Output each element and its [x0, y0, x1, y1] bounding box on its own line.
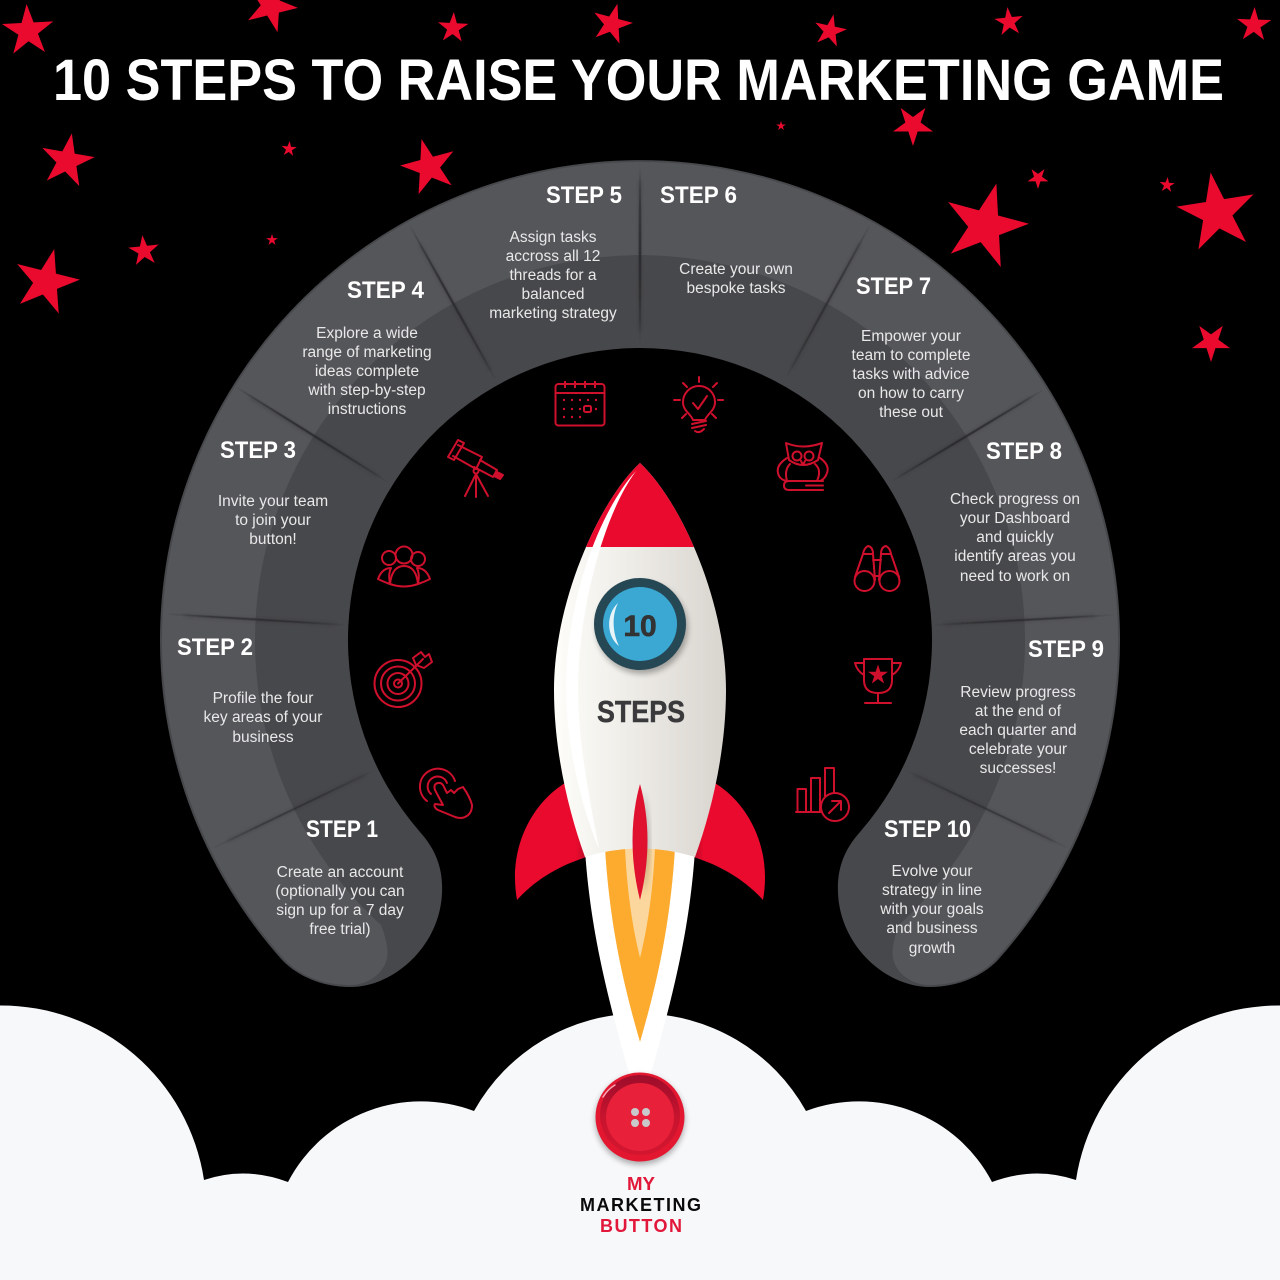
icon: binoculars	[854, 546, 900, 591]
step 9: Review progress	[960, 684, 1076, 701]
step 7: Empower your	[861, 328, 961, 345]
horseshoe panel of ten steps	[160, 160, 1120, 987]
step 8: Check progress on	[950, 491, 1080, 508]
lighter outer band	[162, 162, 1118, 985]
orange flame	[605, 848, 675, 1042]
step 2	[177, 634, 322, 746]
step 9: celebrate your	[969, 741, 1067, 758]
step 5: marketing strategy	[489, 305, 617, 322]
logo text: MARKETING	[580, 1195, 701, 1215]
rocket fins	[515, 783, 587, 900]
step 5: Assign tasks	[509, 229, 597, 246]
step 9: each quarter and	[959, 722, 1077, 739]
step 2: STEP 2	[177, 634, 253, 661]
rocket	[515, 460, 765, 1080]
pale inner flame	[625, 848, 655, 958]
stars	[1, 0, 1272, 362]
step 8: need to work on	[960, 568, 1070, 585]
step 9: STEP 9	[1028, 636, 1104, 663]
logo button	[595, 1072, 685, 1165]
step 7: team to complete	[852, 347, 970, 364]
step 10: growth	[909, 940, 955, 957]
step 4: STEP 4	[347, 277, 425, 304]
icon: team of people	[378, 546, 430, 586]
rocket body	[554, 463, 726, 857]
logo text: BUTTON	[600, 1216, 682, 1236]
step 10: and business	[886, 920, 978, 937]
icon: trophy with star	[855, 659, 901, 703]
step 8: and quickly	[976, 529, 1054, 546]
step 1	[275, 816, 405, 938]
step 2: Profile the four	[213, 690, 313, 707]
step 7: these out	[879, 404, 944, 421]
icon: target with arrow	[374, 652, 432, 707]
segment creases	[167, 166, 1113, 848]
step 5: STEP 5	[546, 182, 622, 209]
step 4: instructions	[328, 401, 406, 418]
step 1: sign up for a 7 day	[276, 902, 404, 919]
step 9: at the end of	[975, 703, 1062, 720]
step 4: with step-by-step	[307, 382, 426, 399]
icon: calendar	[556, 381, 604, 426]
clouds	[0, 1005, 1280, 1280]
logo text: MY	[627, 1174, 655, 1194]
step 6: Create your own	[679, 261, 793, 278]
icon: click hand	[420, 769, 472, 818]
step 3	[218, 437, 328, 548]
step 5: balanced	[522, 286, 584, 303]
step 7: tasks with advice	[852, 366, 970, 383]
step 1: STEP 1	[306, 816, 378, 843]
step 5	[489, 182, 622, 322]
step 4: range of marketing	[302, 344, 432, 361]
step 2: business	[232, 729, 294, 746]
step 3: button!	[249, 531, 297, 548]
window	[594, 578, 688, 674]
body highlight	[566, 471, 636, 849]
segment crease shadows	[185, 180, 1095, 841]
icon: telescope	[448, 440, 503, 497]
step 8: STEP 8	[986, 438, 1062, 465]
step 7	[852, 273, 970, 421]
step 6	[660, 182, 793, 297]
window: 10	[623, 610, 657, 643]
centre fin	[644, 790, 649, 895]
step 8: identify areas you	[954, 548, 1076, 565]
step 10: Evolve your	[892, 863, 972, 880]
step 10	[879, 816, 984, 957]
step 7: on how to carry	[858, 385, 964, 402]
step 8	[950, 438, 1080, 585]
step 3: to join your	[235, 512, 311, 529]
horseshoe base shape	[160, 160, 1120, 987]
step 3: STEP 3	[220, 437, 296, 464]
white exhaust flame	[585, 850, 695, 1080]
step 10: with your goals	[879, 901, 984, 918]
step 10: STEP 10	[884, 816, 971, 843]
step 9	[959, 636, 1104, 777]
step 3: Invite your team	[218, 493, 328, 510]
step 1: free trial)	[309, 921, 371, 938]
step 6: STEP 6	[660, 182, 737, 209]
step 10: strategy in line	[882, 882, 982, 899]
step 9: successes!	[980, 760, 1056, 777]
step 2: key areas of your	[204, 709, 322, 726]
step 6: bespoke tasks	[686, 280, 786, 297]
icon: owl on book	[778, 443, 828, 490]
step 4: Explore a wide	[316, 325, 418, 342]
step 4: ideas complete	[315, 363, 419, 380]
step 5: accross all 12	[506, 248, 600, 265]
nose cone	[586, 463, 694, 547]
icon: light bulb with check	[674, 377, 723, 432]
step 4	[302, 277, 432, 418]
logo text	[580, 1174, 701, 1236]
rocket label: STEPS	[597, 694, 685, 729]
step 1: Create an account	[277, 864, 404, 881]
step 1: (optionally you can	[275, 883, 405, 900]
icon: bar chart with arrow	[796, 768, 849, 821]
step 8: your Dashboard	[960, 510, 1070, 527]
logo	[580, 1072, 701, 1236]
step 5: threads for a	[509, 267, 597, 284]
step 7: STEP 7	[856, 273, 931, 300]
